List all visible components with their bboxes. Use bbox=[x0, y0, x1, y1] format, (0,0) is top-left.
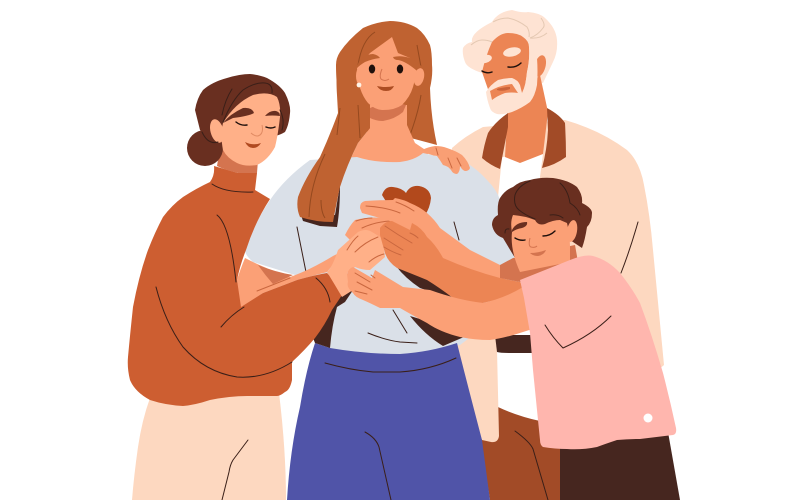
shirt folds bbox=[297, 222, 459, 343]
mother hair shadow bbox=[300, 185, 340, 227]
grandfather shirt shadow bbox=[495, 335, 533, 353]
grandfather jacket fold bbox=[621, 222, 638, 273]
boy eyebrow bbox=[512, 222, 527, 232]
grandfather eyes bbox=[482, 63, 521, 73]
left woman mouth bbox=[245, 142, 261, 148]
mother arm shadow bbox=[258, 265, 293, 284]
boy neck shadow bbox=[500, 245, 578, 285]
mother eyebrows bbox=[357, 54, 422, 70]
middle hand finger lines bbox=[384, 226, 418, 255]
mother shirt bbox=[245, 153, 520, 356]
trouser fold bbox=[222, 440, 248, 500]
boy nose bbox=[529, 238, 537, 247]
grandfather mouth bbox=[490, 84, 518, 100]
boy ear bbox=[565, 219, 579, 243]
boy mouth bbox=[530, 250, 546, 256]
mother hair lines bbox=[309, 32, 375, 218]
left woman trousers bbox=[132, 393, 286, 500]
mother mouth bbox=[377, 86, 394, 91]
left woman finger lines bbox=[347, 218, 390, 262]
mother hair strand bbox=[407, 45, 421, 143]
dark shadows under arms bbox=[310, 266, 464, 348]
grandfather beard bbox=[486, 47, 538, 114]
grandfather hair curls bbox=[471, 18, 547, 45]
left woman neck shadow bbox=[217, 147, 258, 173]
shirt button bbox=[644, 414, 652, 422]
left woman nose bbox=[251, 125, 262, 136]
left woman sweater bbox=[128, 166, 342, 406]
mother ears bbox=[412, 67, 426, 87]
left woman hand bbox=[327, 218, 393, 297]
mother arm line bbox=[257, 278, 290, 291]
boy hair lines bbox=[505, 181, 580, 233]
boy finger lines bbox=[355, 273, 375, 294]
left woman figure bbox=[128, 74, 342, 500]
boy arm bbox=[347, 267, 550, 340]
boy figure bbox=[347, 178, 680, 500]
left woman hair bbox=[195, 74, 290, 145]
grandfather collar bbox=[482, 108, 566, 169]
boy shirt bbox=[520, 256, 676, 449]
hand finger lines bbox=[436, 148, 461, 168]
mother skirt bbox=[287, 343, 490, 500]
left woman face bbox=[222, 93, 280, 166]
front hand bbox=[327, 230, 385, 297]
grandfather neck bbox=[505, 75, 548, 163]
mother eyes bbox=[369, 64, 375, 74]
upper hand finger lines bbox=[366, 202, 414, 213]
skirt folds bbox=[325, 358, 456, 500]
heart on shirt bbox=[382, 186, 431, 232]
middle hand and arm bbox=[380, 221, 530, 303]
mother hair lock bbox=[297, 50, 370, 222]
back hand bbox=[345, 218, 393, 250]
boy hair bbox=[492, 178, 592, 258]
mother arm skin bbox=[237, 250, 345, 308]
mother nose bbox=[380, 69, 389, 80]
mother face bbox=[357, 37, 417, 110]
upper hand and arm bbox=[360, 198, 510, 300]
left woman ear bbox=[208, 118, 226, 144]
shirt pocket line bbox=[545, 316, 611, 348]
mother hair back bbox=[336, 21, 437, 145]
mother neck shadow bbox=[370, 100, 406, 121]
grandfather ear bbox=[532, 54, 548, 78]
sweater lines bbox=[156, 184, 330, 377]
boy face bbox=[511, 215, 570, 272]
grandfather face bbox=[482, 33, 529, 95]
left woman eyes bbox=[236, 122, 275, 128]
left woman hair lines bbox=[202, 83, 283, 143]
grandfather jacket bbox=[440, 120, 664, 442]
grandfather trousers bbox=[480, 407, 560, 500]
grandfather hair back bbox=[463, 10, 557, 83]
boy trousers bbox=[560, 432, 680, 500]
mother neck and chest bbox=[350, 105, 430, 165]
left woman bun bbox=[187, 130, 223, 166]
grandfather hand on shoulder bbox=[422, 146, 470, 174]
mother figure bbox=[245, 21, 520, 500]
grandfather figure bbox=[440, 10, 664, 500]
boy eyes bbox=[515, 231, 555, 240]
grandfather trouser fold bbox=[515, 431, 548, 500]
mother earring bbox=[357, 83, 361, 87]
left woman eyebrows bbox=[223, 108, 280, 123]
grandfather eyebrows bbox=[502, 46, 522, 58]
